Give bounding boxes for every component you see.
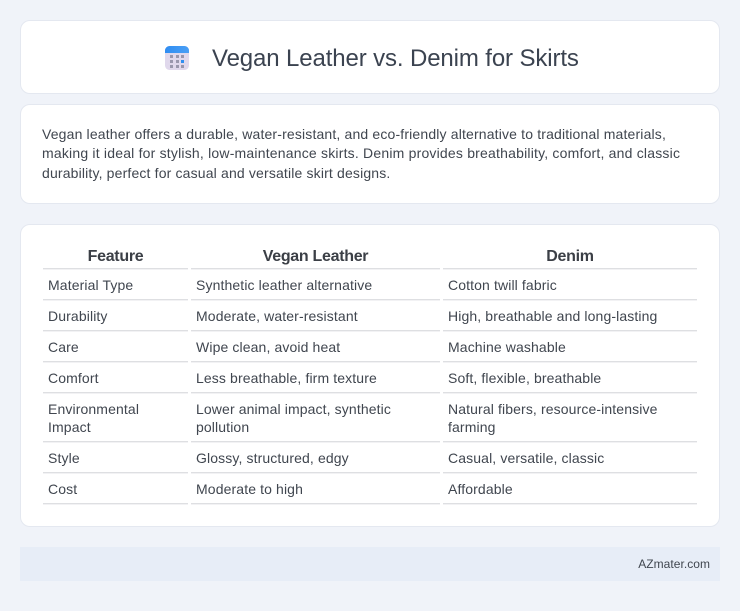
panel: intro text bbox=[20, 104, 720, 204]
intro paragraph: durability, perfect for casual and versatile skirt designs. bbox=[42, 165, 390, 181]
intro paragraph: Vegan leather offers a durable, water-resistant, and eco-friendly alternative to traditional materials, bbox=[42, 126, 666, 142]
row: environmental impact: Environmental bbox=[48, 401, 139, 417]
title: Vegan Leather vs. Denim for Skirts bbox=[212, 45, 579, 72]
panel: title header bbox=[20, 20, 720, 94]
row: care: Machine washable bbox=[448, 339, 566, 355]
intro paragraph bbox=[42, 126, 680, 181]
row: environmental impact: pollution bbox=[196, 419, 249, 435]
row: durability: High, breathable and long-lasting bbox=[448, 308, 657, 324]
icon: calendar grid bbox=[165, 46, 189, 70]
row: style: Style bbox=[48, 450, 80, 466]
row: material type: Cotton twill fabric bbox=[448, 277, 557, 293]
footer credit: AZmater.com bbox=[638, 557, 710, 571]
row: environmental impact: Impact bbox=[48, 419, 91, 435]
row: style: Casual, versatile, classic bbox=[448, 450, 604, 466]
intro paragraph: making it ideal for stylish, low-maintenance skirts. Denim provides breathability, comfort, and classic bbox=[42, 145, 680, 161]
row: cost: Affordable bbox=[448, 481, 513, 497]
row: comfort: Comfort bbox=[48, 370, 99, 386]
row: care: Wipe clean, avoid heat bbox=[196, 339, 340, 355]
row: material type: Material Type bbox=[48, 277, 133, 293]
row: style: Glossy, structured, edgy bbox=[196, 450, 349, 466]
row: style bbox=[48, 450, 604, 466]
row: environmental impact: Natural fibers, resource-intensive bbox=[448, 401, 658, 417]
row: material type: Synthetic leather alternative bbox=[196, 277, 372, 293]
column headers: Feature bbox=[88, 248, 143, 265]
row: durability: Durability bbox=[48, 308, 108, 324]
panel: comparison table bbox=[20, 224, 720, 527]
row: environmental impact: farming bbox=[448, 419, 496, 435]
row: environmental impact: Lower animal impact, synthetic bbox=[196, 401, 391, 417]
row: cost: Cost bbox=[48, 481, 77, 497]
row: durability bbox=[48, 308, 657, 324]
row: durability: Moderate, water-resistant bbox=[196, 308, 358, 324]
row: comfort: Soft, flexible, breathable bbox=[448, 370, 601, 386]
row: comfort: Less breathable, firm texture bbox=[196, 370, 377, 386]
row: care: Care bbox=[48, 339, 79, 355]
row: care bbox=[48, 339, 566, 355]
column headers bbox=[88, 248, 594, 265]
row: cost bbox=[48, 481, 513, 497]
row: cost: Moderate to high bbox=[196, 481, 303, 497]
row: material type bbox=[48, 277, 557, 293]
row: comfort bbox=[48, 370, 601, 386]
footer bar bbox=[20, 547, 720, 581]
column headers: Vegan Leather bbox=[263, 248, 368, 265]
column headers: Denim bbox=[546, 248, 594, 265]
row: environmental impact bbox=[48, 401, 658, 435]
